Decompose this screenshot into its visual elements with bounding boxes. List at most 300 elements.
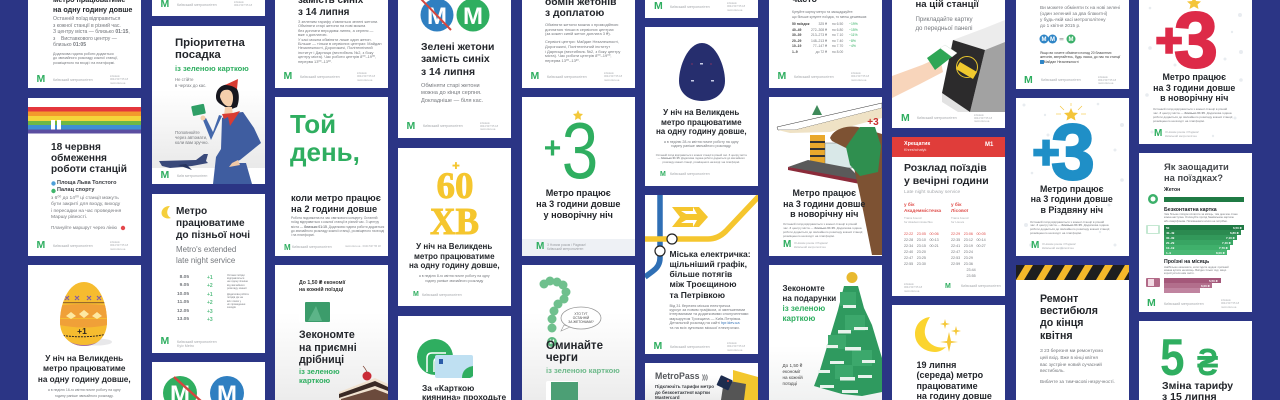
green subheading: карткою <box>299 376 330 384</box>
footer <box>36 73 128 85</box>
fare discount: −8% <box>849 39 856 43</box>
small print <box>398 274 510 284</box>
body text: вас зустріне новий сучасний <box>1040 362 1102 367</box>
body text: вестибюль. <box>1040 368 1065 373</box>
footer: Київський метрополітен <box>917 116 957 120</box>
contactless section title: Безконтактна картка <box>1164 207 1217 213</box>
body text <box>53 16 130 48</box>
body text: вже з доплатою. <box>298 32 328 37</box>
big green headline: Той <box>290 109 336 139</box>
footer: metro.kiev.ua <box>974 120 989 123</box>
small print <box>291 216 384 237</box>
fare discount: −4% <box>849 44 856 48</box>
heading: Метро працює <box>792 188 856 198</box>
heading: обмеження <box>51 153 107 164</box>
footer: Kyiv Metro <box>177 344 194 348</box>
body text: і пересадки на час проведення <box>51 209 121 214</box>
fare discount: −11% <box>849 33 858 37</box>
poster: that day <box>275 97 388 256</box>
heading: дрібниці <box>299 354 344 366</box>
bar chart: fares: 50 <box>1166 226 1170 230</box>
heading: коли метро працює <box>291 192 381 202</box>
footer: М <box>660 171 666 178</box>
heading: на приємні <box>299 342 357 354</box>
tiny notes <box>645 154 758 165</box>
column 1 posters <box>28 0 141 400</box>
footer: 0044 537 55 18 <box>904 286 922 289</box>
heading <box>768 188 880 220</box>
fare table <box>792 22 809 56</box>
small print <box>48 388 121 398</box>
bar chart: fares: 6,00 ₴ <box>1201 284 1210 288</box>
green subheading: із зеленою <box>782 304 825 313</box>
heading <box>782 284 836 304</box>
body text: з Виставкового центру — <box>53 36 117 42</box>
footer: Київський метрополітен <box>670 4 710 8</box>
bar chart: fares: 7,40 ₴ <box>1222 241 1231 245</box>
footer: Київський метрополітен <box>794 245 826 249</box>
body text: Більше — тільки в сервісних центрах: Майдан <box>298 41 382 46</box>
heading <box>298 0 364 18</box>
poster: Christmas blue +3 <box>1016 98 1128 256</box>
body text: до безконтактної картки <box>655 390 710 394</box>
footer <box>1016 74 1128 86</box>
heading: Ремонт <box>1040 292 1078 304</box>
direction left english: for Akademmistechko <box>904 220 933 224</box>
footer: infodesk <box>974 114 984 116</box>
footer: 0044 537 55 18 <box>1098 79 1116 82</box>
small print: Робота подовжена на час святкового концерту. Останній <box>291 216 377 220</box>
side notes: розкладу кожної <box>227 287 247 290</box>
footer <box>892 112 1004 124</box>
icon: two blue tokens equal one green: М <box>1050 37 1055 43</box>
route note: Плануйте маршрут через лінію <box>51 225 117 230</box>
illustration: validator with card <box>645 363 758 400</box>
illustration: validator and hand with card <box>892 0 1005 128</box>
green subheading <box>299 367 340 384</box>
side notes: на годину пізніше <box>227 280 248 283</box>
poster: token exchange with surcharge <box>522 0 634 88</box>
footer <box>1139 298 1252 310</box>
body text: (за кожен синій жетон доплата 3 ₴). <box>545 31 611 36</box>
footer: metro.kiev.ua <box>1221 306 1236 309</box>
footer: М <box>654 340 662 352</box>
note top <box>175 77 206 88</box>
heading <box>53 0 132 14</box>
heading: Міська електричка: <box>670 248 751 258</box>
heading: на 3 години довше <box>1031 194 1113 204</box>
heading: працюватиме <box>916 380 978 390</box>
bar chart: fares <box>1139 153 1252 312</box>
big green price: 5 ₴ <box>1160 329 1218 387</box>
gradient backdrop and flight attendant illustration <box>152 79 265 184</box>
footer: Київський метрополітен <box>422 292 462 296</box>
footer: 0044 537 55 18 <box>727 345 745 348</box>
footer: 0044 537 55 18 <box>604 75 622 78</box>
savings note: До 1,50 ₴ економії <box>299 280 345 286</box>
big yellow 60 ХВ lettering: 60 <box>436 166 474 207</box>
small print: до звичайного розкладу кожної станції, розміщеного на вході <box>291 229 384 233</box>
fare price: по 6.50 <box>832 22 843 26</box>
heading: замість синіх <box>421 54 490 65</box>
body text: близько 01:05 <box>53 42 86 48</box>
extra hours: +2 <box>207 283 213 289</box>
small print: розміщеного на вході і на платформі. <box>783 234 835 238</box>
heading <box>1138 72 1250 104</box>
extra hours: +3 <box>207 308 213 314</box>
direction right english: for Lisova <box>951 220 964 224</box>
fare table: 50 поїздок <box>792 22 809 26</box>
body text: Обміняти старі жетони <box>421 82 480 88</box>
timetable right: 22:35 23:12 00:14 <box>951 238 986 242</box>
small print: міста — близько 01:15. Додаткова година роботи додається <box>291 225 384 229</box>
side notes: відправляться <box>227 277 244 280</box>
timetable left: 22:47 23:25 <box>904 256 926 260</box>
direction right <box>951 202 968 214</box>
heading: Метро працює <box>1162 72 1226 82</box>
passes section title: Проїзні на місяць <box>1164 259 1209 265</box>
heading: працюватиме <box>176 218 245 229</box>
bar chart: fares: 7,10 ₴ <box>1226 236 1235 240</box>
service centres: міста). Час роботи центрів 8⁰⁰–19⁰⁰, <box>545 53 612 58</box>
service centres: Сервісні центри: Майдан Незалежності, <box>545 39 619 44</box>
savings note: поїздці <box>782 381 797 386</box>
extra hours: +2 <box>207 300 213 306</box>
heading: та Петрівкою <box>670 290 725 300</box>
body text <box>670 304 748 330</box>
small print: годину раніше звичайного розкладу. <box>55 394 114 398</box>
timetable left: 22:34 23:15 00:21 <box>904 244 939 248</box>
footer: 0044 537 55 18 <box>234 4 252 7</box>
heading <box>421 42 494 78</box>
heading: у новорічну ніч <box>544 210 613 220</box>
contactless note <box>1164 213 1238 223</box>
poster: Khreshchatyk timetable <box>892 137 1004 296</box>
icon: two blue tokens equal one green <box>1016 0 1129 89</box>
footer <box>406 120 498 132</box>
body text <box>51 195 121 220</box>
small print: а в неділю 16-го квітня почне роботу на одну <box>48 388 121 392</box>
heading: 18 червня <box>51 142 101 153</box>
heading <box>398 242 510 271</box>
green subheading: із зеленою <box>299 367 340 376</box>
heading: до пізньої ночі <box>176 230 250 241</box>
poster: 60 minutes Easter <box>398 148 510 306</box>
footer: infodesk <box>480 122 490 124</box>
heading <box>522 188 634 222</box>
big yellow 60 ХВ lettering: ХВ <box>430 201 479 243</box>
poster: June 18 restrictions <box>28 98 140 256</box>
timetable: 11.05 <box>177 300 189 305</box>
illustration: snow, star and blue +3 <box>1016 98 1129 256</box>
footer <box>160 0 252 10</box>
footer <box>36 239 128 251</box>
illustration: metro map lines and arrow <box>645 195 758 354</box>
extra hours: +3 <box>207 317 213 323</box>
savings note: економії <box>782 369 800 374</box>
poster: priority boarding <box>152 26 264 184</box>
icon: crossed blue and green tokens <box>420 0 490 32</box>
direction right: Лісової <box>951 208 968 213</box>
footer: infodesk <box>851 72 861 75</box>
heading: вестибюля <box>1040 305 1098 317</box>
heading: в новорічну ніч <box>1160 93 1228 103</box>
bar chart: fares: 40–49 <box>1166 231 1175 235</box>
icon: crossed green and blue tokens <box>163 376 244 400</box>
body text: Маршу рівності. <box>51 215 87 220</box>
body text: Від 31 березня міська електричка <box>670 302 730 308</box>
poster: save on small pleasures <box>275 265 388 400</box>
fare discount: −15% <box>849 28 858 32</box>
icon: crossed blue and green tokens: М <box>427 3 447 30</box>
heading: метро працюватиме <box>661 118 742 127</box>
illustration: question mark of tokens with speech bubble: ЗА ЖЕТОНАМИ? <box>568 320 594 324</box>
footer: М <box>1031 240 1039 250</box>
english subtitle: Metro's extended <box>176 245 236 254</box>
timetable <box>177 274 189 322</box>
footer: infodesk <box>1098 76 1108 78</box>
bar chart: fares: 20–29 <box>1166 241 1175 245</box>
body text: інтервалами та додатковими сполученнями <box>670 311 748 316</box>
footer: infodesk <box>727 2 737 5</box>
body text: курсує за новим графіком, зі зменшеними <box>670 307 745 312</box>
english subtitle: late night service <box>176 256 235 265</box>
fare price: по 7.40 <box>832 39 843 43</box>
body text <box>1040 4 1120 29</box>
small print: роботи додається до звичайного розкладу кожної станції, <box>1153 115 1233 119</box>
heading <box>670 248 751 300</box>
note top: Не стійте <box>175 77 193 82</box>
poster: green tokens <box>398 0 510 138</box>
poster: tokens circles <box>152 362 264 400</box>
footer: М <box>901 112 910 124</box>
footer panel <box>522 239 635 256</box>
small print: і на платформі. <box>291 233 314 237</box>
footer: metro.kiev.ua <box>604 79 619 82</box>
fare table: 30–39 <box>792 33 801 37</box>
note bottom: Поповнюйте <box>175 130 200 134</box>
extra hours <box>207 274 213 323</box>
station list: Площа Льва Толстого <box>57 180 116 186</box>
footer: 0044 537 55 18 <box>851 75 869 78</box>
small print: а в неділю 8-го квітня почне роботу на одну <box>419 274 490 278</box>
fare price <box>832 22 843 56</box>
heading: метро працюватиме <box>414 252 495 261</box>
poster: station and dragon <box>769 97 882 256</box>
direction left <box>904 202 941 214</box>
body text: перерва 13⁰⁰–13³⁰. <box>298 59 332 64</box>
heading: Метро працює <box>1040 184 1104 194</box>
fare sums <box>809 22 827 56</box>
small print: до звичайного розкладу кожної станції, <box>53 56 118 60</box>
heading: Метро <box>176 206 207 217</box>
bar chart: fares: 8,00 ₴ <box>1216 251 1225 255</box>
heading: на одну годину довше, <box>38 374 131 384</box>
timetable right: 22:53 23:29 <box>951 256 973 260</box>
footer: М <box>413 291 419 298</box>
illustration: snow, star and red +3 <box>1139 0 1252 144</box>
footer: М <box>160 335 169 347</box>
body text <box>421 82 483 104</box>
bar chart: fares: 30–39 <box>1166 236 1175 240</box>
heading: MetroPass ))) <box>655 370 708 380</box>
contactless note: Чим більше поїздок оплатите за місяць, тим дешчою стане <box>1164 213 1238 216</box>
poster: one hour longer <box>28 0 140 88</box>
footer: З Новим роком і Різдвом! <box>1042 242 1076 246</box>
illustration: question mark of tokens with speech bubble: ХТО ТУТ <box>574 312 588 316</box>
body text: бути закриті для входу, виходу <box>51 202 120 207</box>
body text: можна до кінця серпня. <box>421 90 482 96</box>
poster: MetroPass <box>645 363 758 400</box>
fare sums: 272–308 ₴ <box>811 28 827 32</box>
footer: М <box>783 239 791 250</box>
footer: infodesk <box>727 342 737 345</box>
red station band <box>892 137 1005 157</box>
timetable right: 22:47 23:24 <box>951 250 973 254</box>
direction right: у бік <box>951 202 961 207</box>
heading: За «Карткою <box>422 383 474 393</box>
illustration: snow, star and blue +3: 3 <box>1051 107 1095 196</box>
poster footer fragment <box>645 0 758 18</box>
small print: годину раніше звичайного розкладу <box>425 278 483 282</box>
fare table: 40–49 <box>792 28 801 32</box>
footer: М <box>406 120 415 132</box>
footer: З Новим роком і Різдвом! <box>794 241 828 245</box>
poster footer fragment <box>152 0 264 16</box>
side notes: всіх лініях у <box>227 300 241 303</box>
heading: Оминайте <box>546 340 603 352</box>
fare table: 1–9 <box>792 50 798 54</box>
body text: та на всіх зупинках міської електрички. <box>670 325 740 330</box>
body text <box>1040 348 1103 375</box>
illustration: snow, star and blue +3: + <box>1033 126 1059 178</box>
heading: Зелені жетони <box>421 42 494 52</box>
heading: Зекономте <box>782 284 825 292</box>
footer: Київський метрополітен <box>292 244 332 248</box>
footer: 0044 537 55 18 <box>1221 302 1239 305</box>
fare table: 10–19 <box>792 44 801 48</box>
small print: а в неділю 28-го квітня почне роботу на одну <box>664 140 739 144</box>
body text: до передньої панелі <box>916 25 972 32</box>
direction right english <box>951 216 968 224</box>
small print <box>1030 220 1110 236</box>
footer panel: М <box>536 241 544 252</box>
small print <box>53 52 118 65</box>
body text: З центру міста — близько 01:15, <box>53 29 130 35</box>
apology note: Вибачте за тимчасові незручності. <box>1040 379 1115 384</box>
small print: час. З центру міста — близько 01:15. Додаткова година <box>783 226 862 230</box>
poster: frequent trips table <box>769 0 882 88</box>
illustration: question mark of tokens with speech bubble: М <box>550 340 554 346</box>
poster: New Year red +3 <box>1139 0 1252 144</box>
body text <box>298 19 382 64</box>
small print <box>1040 50 1120 64</box>
fare sums: 148–213 ₴ <box>811 39 827 43</box>
footer: 0044 537 55 18 <box>727 5 745 8</box>
footer <box>769 71 882 83</box>
savings note <box>782 363 803 387</box>
small print: жетонів, звертайтесь, будь ласка, до нас на станції <box>1040 55 1120 59</box>
heading: роботи станцій <box>51 164 127 175</box>
body text: без доплати впродовж липня, а серпня — <box>298 28 373 33</box>
timetable left: 22:55 23:30 <box>904 262 926 266</box>
heading: Як заощадити <box>1164 161 1229 172</box>
footer: М <box>945 283 951 290</box>
poster: fare change <box>1139 321 1252 400</box>
heading <box>51 142 127 175</box>
body text <box>545 23 618 37</box>
small print: Майдан Незалежності <box>1044 60 1079 64</box>
heading: метро працюватиме <box>43 364 125 373</box>
poster: dark egg <box>645 27 758 186</box>
red station band: Хрещатик <box>904 141 930 147</box>
body text: Останній поїзд відправиться <box>53 16 120 22</box>
footer: metro.kiev.ua <box>904 290 919 293</box>
station list <box>57 180 116 193</box>
heading <box>916 360 992 400</box>
small print: роботи додається до звичайного розкладу кожної станції, <box>1030 227 1110 231</box>
note bottom <box>175 130 209 145</box>
red station band: М1 <box>985 142 993 148</box>
big green +3 with star: + <box>544 132 561 165</box>
big yellow 60 ХВ lettering <box>398 148 511 306</box>
body text <box>916 15 973 33</box>
footer panel: Київський метрополітен <box>547 247 583 251</box>
footer: 0044 537 55 18 <box>357 75 375 78</box>
fare table: 20–29 <box>792 39 801 43</box>
footer: Київський метрополітен <box>794 74 834 78</box>
footer: infodesk <box>904 283 914 286</box>
poster: Christmas tree of cards <box>769 265 882 400</box>
contactless note: кожна наступна. Оплачуйте проїзд банківською карткою <box>1164 216 1234 219</box>
footer: infodesk <box>1221 299 1231 302</box>
small print: час. З центру міста — близько 01:15. Додаткова година <box>1153 111 1232 115</box>
small print: Останній поїзд відправиться з кожної станції в різний <box>1153 107 1227 111</box>
footer: М <box>160 169 169 181</box>
illustration: station with dragon and tree: +3 <box>867 117 879 128</box>
footer: infodesk <box>234 1 244 4</box>
footer <box>1139 128 1252 140</box>
body text: Підключіть тарифи метро <box>655 384 714 389</box>
timetable right: 22:59 23:36 <box>951 262 973 266</box>
footer <box>160 169 208 181</box>
service centres <box>545 40 620 64</box>
footer <box>892 281 1004 293</box>
small print: час. З центру міста — близько 01:15. Додаткова година <box>1030 223 1109 227</box>
heading: на 3 години довше <box>536 199 620 209</box>
footer <box>284 243 381 252</box>
illustration: turnstile and card <box>398 316 511 400</box>
small print: Останній поїзд відправиться з кожної станції в різний <box>783 222 857 226</box>
heading: Зекономте <box>299 329 355 341</box>
footer: Київський метрополітен <box>1042 246 1074 250</box>
big green headline: день, <box>290 137 360 167</box>
green subheading: із зеленою карткою <box>175 64 249 72</box>
side notes: Останні поїзди <box>227 274 245 277</box>
heading: Метро працює <box>546 188 611 198</box>
body text: центру міста). Час роботи центрів 8⁰⁰–19⁰⁰, <box>298 54 376 59</box>
heading <box>645 108 758 137</box>
timetable right: 22:41 23:19 00:27 <box>951 244 986 248</box>
passes note: користуєтеся ним часто. <box>1164 272 1195 275</box>
footer <box>522 71 634 83</box>
footer: metro.kiev.ua <box>727 9 742 12</box>
body text: Незалежності, Дорогожичі, Політехнічний <box>298 45 373 50</box>
footer: М <box>654 0 663 12</box>
heading <box>546 341 603 365</box>
footer: Київський метрополітен <box>300 74 340 78</box>
side notes <box>227 274 249 309</box>
